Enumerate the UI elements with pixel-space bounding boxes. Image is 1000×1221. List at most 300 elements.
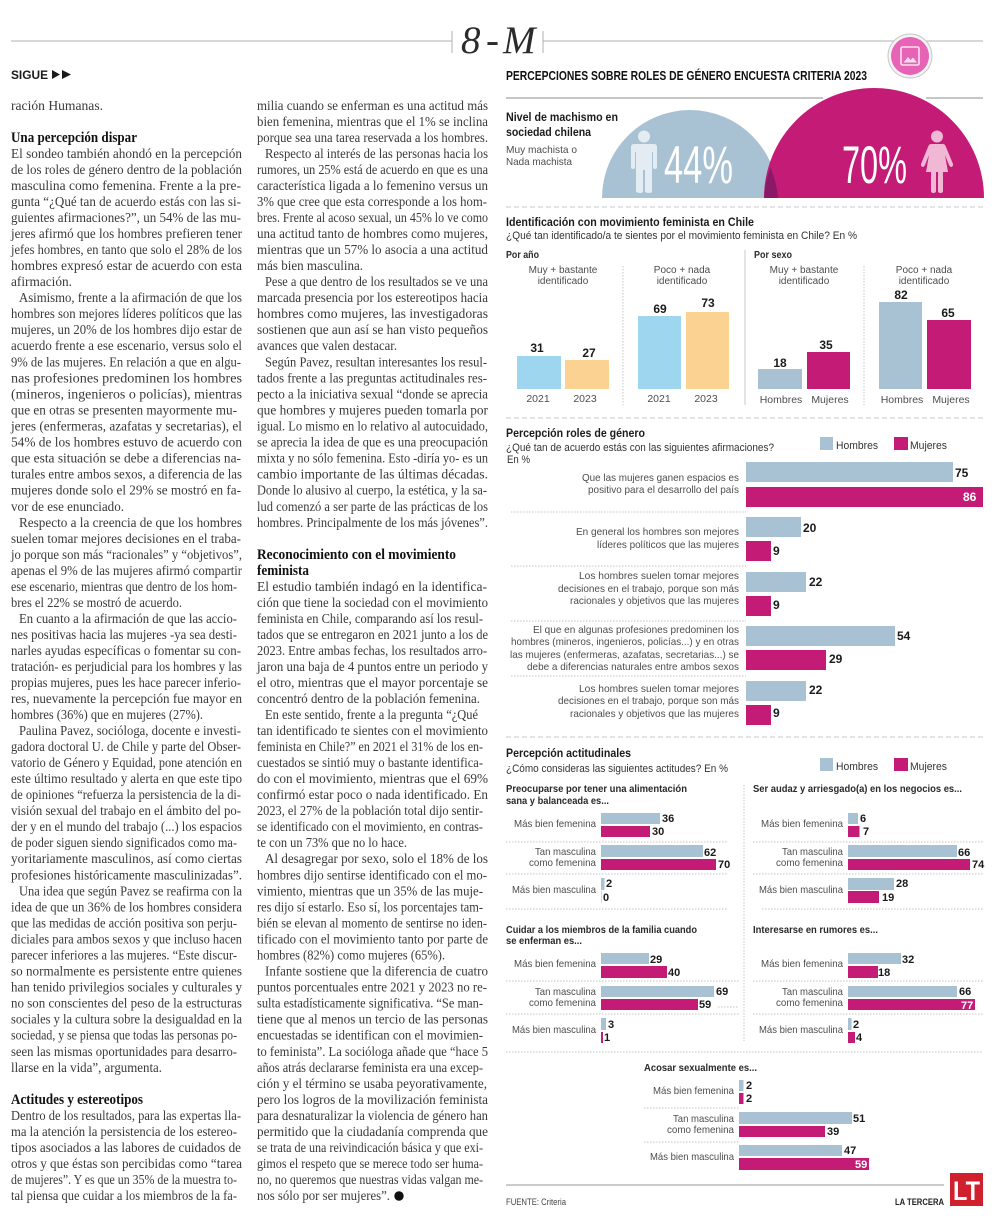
note: muy machista o nada machista: Muy machista o (506, 144, 577, 156)
legend: Hombres (836, 440, 878, 452)
paragraph: según Pavez: se aprecia la idea de que es una preocupación (257, 436, 488, 451)
paragraph: en este sentido (257, 708, 488, 851)
heading: Actitudes y estereotipos: Actitudes y estereotipos (11, 1092, 143, 1108)
paragraph: en este sentido: tan identificado te sientes con el movimiento (257, 724, 488, 739)
credit: La Tercera: LA TERCERA (895, 1197, 944, 1208)
row: mejores decisiones (repetida): 9 (773, 706, 780, 720)
panel: percepción actitudinales (506, 746, 985, 1171)
paragraph: al desagregar: hombres (82%) como mujeres (65%). (257, 949, 445, 964)
chart: por sexo muy + bastante identificado: Hombres (760, 394, 802, 406)
chart: por año poco + nada identificado: 2021 (647, 393, 671, 405)
row: mejores decisiones (repetida): Los hombres suelen tomar mejores (579, 683, 739, 695)
paragraph: una idea: no son conscientes del peso de la estructuras (11, 997, 242, 1012)
icon: image badge (888, 34, 932, 78)
paragraph: sondeo: jefes hombres, en tanto que solo el 28% de los (10, 243, 242, 258)
chart: acosar sexualmente: Acosar sexualmente es... (644, 1062, 757, 1074)
chart: cuidar a la familia: se enferman es... (506, 935, 582, 947)
icon: woman (921, 130, 953, 193)
chart: por año poco + nada identificado (638, 265, 729, 405)
row: mejores líderes políticos: 20 (803, 521, 817, 535)
paragraph: asimismo: (mineros, ingenieros o policías), mientras (11, 388, 242, 402)
paragraph: asimismo: acuerdo frente a ese escenario, versus solo el (11, 339, 242, 354)
chart: alimentación sana: 0 (603, 892, 609, 904)
paragraph: una idea: seen las mismas oportunidades para desarro- (11, 1045, 237, 1060)
paragraph: acciones positivas: hombres (36%) que en mujeres (27%). (11, 708, 203, 723)
paragraph: acciones positivas (11, 612, 242, 723)
page header: 8-M (11, 19, 983, 62)
paragraph: sondeo: afirmación. (11, 275, 72, 290)
SIGUE tag (11, 68, 71, 82)
paragraph: rumores (257, 147, 489, 274)
chart: por año muy + bastante identificado: identificado (538, 276, 589, 287)
heading: nivel de machismo: sociedad chilena (506, 125, 591, 139)
chart: alimentación sana: sana y balanceada es... (506, 795, 609, 807)
chart: por sexo poco + nada identificado (879, 265, 971, 406)
paragraph: el estudio: El estudio también indagó en la identifica- (257, 580, 487, 595)
chart: audaz en negocios: 28 (896, 878, 908, 890)
paragraph: el estudio: tados que se entregaron en 2021 junto a los de (257, 628, 488, 643)
paragraph: asimismo: hombres son mejores líderes políticos que las (11, 307, 242, 322)
paragraph: asimismo: mujeres, un 20% de los hombres dijo estar de (11, 323, 242, 338)
paragraph: según Pavez (257, 356, 489, 531)
chart: audaz en negocios (753, 783, 985, 904)
chart: acosar sexualmente: Más bien femenina (653, 1085, 734, 1097)
chart: acosar sexualmente: Más bien masculina (650, 1151, 734, 1163)
chart: por sexo poco + nada identificado: Mujeres (932, 394, 970, 406)
paragraph: dentro de los resultados: de mujeres”. Y es que un 35% de la muestra to- (11, 1173, 237, 1188)
chart: interesarse en rumores: Interesarse en rumores es... (753, 924, 878, 936)
paragraph: Paulina Pavez: de opiniones “refuerza la persistencia de la di- (11, 788, 241, 803)
chart: mujeres half circle (764, 88, 984, 198)
paragraph: asimismo: 9% de las mujeres. En relación a que en algu- (11, 356, 241, 370)
label: por año: Por año (506, 249, 539, 261)
paragraph: Infante: to feminista”. La socióloga añade que “hace 5 (257, 1045, 488, 1060)
paragraph: el estudio (256, 580, 488, 707)
paragraph: el estudio: el otro, mientras que el mayor porcentaje se (257, 676, 488, 691)
paragraph: dentro de los resultados: Dentro de los resultados, para las expertas lla- (11, 1109, 241, 1124)
paragraph: Paulina Pavez: profesiones históricamente masculinizadas”. (11, 868, 242, 883)
chart: alimentación sana: 70 (718, 859, 730, 871)
chart: por sexo poco + nada identificado: Poco + nada (896, 265, 953, 276)
chart: alimentación sana: 36 (662, 813, 674, 825)
chart: acosar sexualmente: 2 (746, 1080, 752, 1092)
chart: cuidar a la familia: Más bien femenina (514, 958, 596, 970)
paragraph: una idea: diciales para ambos sexos y que incluso hacen (11, 933, 242, 948)
heading: percepción actitudinales: Percepción actitudinales (506, 746, 631, 760)
row: diferencias naturales: 54 (897, 629, 911, 643)
row: mejores decisiones: decisiones en el trabajo, porque son más (558, 583, 739, 595)
chart: alimentación sana (506, 783, 730, 904)
chart: cuidar a la familia: 59 (699, 999, 711, 1011)
paragraph: una idea: que las medidas de acción positiva son perju- (11, 916, 237, 932)
paragraph: Infante (257, 965, 489, 1204)
paragraph: sondeo (10, 147, 243, 290)
paragraph: dentro de los resultados: tal piensa que cuidar a los miembros de la fa- (11, 1189, 237, 1204)
row: mejores decisiones (558, 570, 823, 616)
source note: FUENTE: Criteria (506, 1197, 567, 1208)
chart: por año muy + bastante identificado: 2023 (573, 393, 597, 405)
paragraph: creencia: suelen tomar mejores decisiones en el traba- (11, 532, 241, 547)
chart: acosar sexualmente (644, 1062, 869, 1171)
value: 70%: 70% (842, 136, 907, 195)
paragraph: acciones positivas: narles ayudas específicas o fomentar su con- (11, 644, 241, 659)
legend: Mujeres (910, 761, 947, 773)
paragraph: asimismo: que en otras se presenten mayormente mu- (11, 404, 237, 418)
paragraph: asimismo: nas profesiones predominen los hombres (11, 372, 242, 386)
article column 2 (256, 99, 489, 1204)
paragraph: el estudio: ción que tiene la sociedad con el movimiento (257, 596, 488, 611)
legend: Mujeres (910, 440, 947, 452)
paragraph: rumores: mientras que un 57% lo asocia a una actitud (257, 243, 488, 258)
chart: por sexo poco + nada identificado: Hombres (881, 394, 923, 406)
paragraph: una idea: sociedad, y se piensa que todas las personas po- (11, 1029, 237, 1044)
paragraph: una idea: so normalmente es persistente entre quienes (11, 965, 242, 980)
article column 1 (10, 99, 243, 1204)
paragraph: asimismo: mujeres donde solo el 29% se mostró en fa- (11, 484, 241, 499)
paragraph: estereotipos: avances que valen destacar. (257, 339, 397, 354)
chart: cuidar a la familia: Tan masculina (535, 986, 596, 998)
chart: cuidar a la familia: 69 (716, 986, 728, 998)
chart: audaz en negocios: Más bien masculina (759, 884, 843, 896)
chart: por sexo poco + nada identificado: 82 (894, 288, 908, 302)
paragraph: Infante: pero los logros de la movilización feminista (257, 1093, 489, 1108)
paragraph: Paulina Pavez (11, 724, 242, 883)
paragraph: Infante: permitido que la ciudadanía comprenda que (257, 1125, 488, 1140)
text block: continuation: ración Humanas. (11, 99, 103, 114)
paragraph: según Pavez: igual. Lo mismo en lo relativo al autocuidado, (257, 420, 488, 435)
row: mujeres ganen espacios (582, 462, 983, 507)
row: mejores decisiones: racionales y objetivos que las mujeres (570, 595, 739, 607)
chart: acosar sexualmente: Tan masculina (673, 1113, 734, 1125)
paragraph: continuation: milia cuando se enferman es una actitud más (257, 99, 488, 114)
chart: cuidar a la familia: 3 (608, 1019, 614, 1031)
paragraph: asimismo: vor de ese enunciado. (11, 500, 124, 515)
paragraph: según Pavez: lud comenzó a ser parte de las prácticas de los (257, 500, 488, 515)
paragraph: en este sentido: se identificado con el movimiento, en contras- (257, 820, 483, 835)
paragraph: creencia: ese escenario, mientras que dentro de los hom- (11, 580, 237, 595)
subheading: pregunta: ¿Qué tan de acuerdo estás con las siguientes afirmaciones? (506, 442, 774, 454)
paragraph: rumores: 3% que cree que esta corresponde a los hom- (257, 195, 487, 210)
row: diferencias naturales: hombres (mineros, ingenieros, policías...) y en otras (511, 636, 739, 648)
paragraph: al desagregar: bién se elevan al momento de sentirse no iden- (257, 916, 487, 932)
paragraph: Infante: ción y el término se usaba peyorativamente, (257, 1077, 487, 1092)
paragraph: Infante: nos sólo por ser mujeres”. (257, 1189, 390, 1204)
paragraph: según Pavez: Donde lo alusivo al cuerpo, la estética, y la sa- (257, 484, 487, 499)
row: diferencias naturales: debe a diferencias naturales entre ambos sexos (527, 661, 739, 673)
paragraph: continuation: bien femenina, mientras que el 1% se inclina (257, 115, 489, 130)
paragraph: en este sentido: do con el movimiento, mientras que el 69% (257, 772, 488, 787)
row: diferencias naturales (510, 624, 911, 673)
paragraph: Infante: gimos el respeto que se merece todo ser huma- (257, 1157, 483, 1172)
chart: cuidar a la familia: 40 (668, 967, 680, 979)
chart: alimentación sana: Más bien femenina (514, 818, 596, 830)
paragraph: al desagregar: hombres dijo sentirse identificado con el mo- (257, 868, 487, 883)
paragraph: sondeo: guientes afirmaciones?”, un 54% de las mu- (11, 211, 241, 226)
paragraph: continuation: porque sea una tarea reservada a los hombres. (257, 131, 488, 146)
heading: nivel de machismo: Nivel de machismo en (506, 110, 618, 124)
chart: alimentación sana: 30 (652, 826, 664, 838)
paragraph: el estudio: feminista en Chile, comparando así los resul- (257, 612, 483, 627)
chart: alimentación sana: Más bien masculina (512, 884, 596, 896)
chart: por año muy + bastante identificado (517, 265, 609, 405)
paragraph: acciones positivas: res, nuevamente la percepción fue mayor en (11, 692, 242, 707)
paragraph: acciones positivas: tratación- es perjudicial para los hombres y las (11, 660, 242, 675)
legend (820, 758, 947, 773)
chart: interesarse en rumores: 2 (853, 1019, 859, 1031)
chart: audaz en negocios: 66 (958, 847, 970, 859)
paragraph: estereotipos: marcada presencia por los estereotipos hacia (257, 291, 489, 306)
paragraph: sondeo: masculina como femenina. Frente a la pre- (11, 179, 241, 194)
paragraph: Infante: no, no queremos que nuestras vidas valgan me- (257, 1173, 483, 1188)
chart: audaz en negocios: Tan masculina (782, 846, 843, 858)
paragraph: al desagregar: res dijo sí estarlo. Eso sí, los porcentajes tam- (257, 900, 483, 916)
paragraph: estereotipos: hombres como mujeres, las investigadoras (257, 307, 488, 322)
chart: interesarse en rumores (753, 924, 983, 1044)
chart: por sexo muy + bastante identificado: 18 (773, 356, 787, 370)
row: mujeres ganen espacios: positivo para el desarrollo del país (588, 484, 739, 496)
paragraph: creencia (10, 516, 242, 611)
row: mejores líderes políticos (576, 517, 817, 561)
paragraph: Paulina Pavez: visión sexual del trabajo en el ámbito del po- (11, 804, 241, 819)
paragraph: Paulina Pavez: der y en el mundo del trabajo (...) los espacios (11, 820, 242, 835)
row: diferencias naturales: 29 (829, 652, 843, 666)
paragraph: acciones positivas: nes positivas hacia las mujeres -ya sea desti- (11, 628, 237, 643)
legend (820, 437, 947, 452)
row: mejores decisiones: 9 (773, 598, 780, 612)
chart: acosar sexualmente: 39 (827, 1126, 839, 1138)
chart: interesarse en rumores: Más bien masculina (759, 1024, 843, 1036)
chart: acosar sexualmente: 2 (746, 1093, 752, 1105)
paragraph: acciones positivas: En cuanto a la afirmación de que las accio- (19, 612, 237, 627)
paragraph: Paulina Pavez: yoritariamente masculinos, así como ciertas (11, 852, 242, 867)
paragraph: Paulina Pavez: vatorio de Género y Equidad, pone atención en (11, 756, 242, 771)
paragraph: creencia: apenas el 9% de las mujeres afirmó compartir (11, 564, 242, 579)
chart: alimentación sana: 2 (606, 878, 612, 890)
chart: interesarse en rumores: Más bien femenina (761, 958, 843, 970)
logo: LT: LT (953, 1176, 980, 1206)
icon: end of article dot (394, 1191, 404, 1201)
chart: por sexo muy + bastante identificado (758, 265, 850, 406)
paragraph: sondeo: jeres afirmó que los hombres prefieren tener (10, 227, 242, 242)
paragraph: estereotipos (257, 275, 489, 354)
heading: identificación: Identificación con movimiento feminista en Chile (506, 215, 754, 229)
chart: por sexo muy + bastante identificado: 35 (819, 338, 833, 352)
paragraph: según Pavez: hombres. Principalmente de los más jóvenes”. (257, 516, 488, 531)
chart: por año muy + bastante identificado: 31 (530, 341, 544, 355)
chart: acosar sexualmente: 47 (844, 1145, 856, 1157)
paragraph: Paulina Pavez: gadora doctoral U. de Chile y parte del Obser- (11, 740, 241, 755)
chart: por sexo muy + bastante identificado: identificado (779, 276, 830, 287)
chart: cuidar a la familia: 1 (604, 1032, 610, 1044)
row: mujeres ganen espacios: Que las mujeres ganen espacios es (582, 472, 739, 484)
chart: por año muy + bastante identificado: Muy + bastante (529, 265, 598, 276)
paragraph: Infante: tiene que al menos un tercio de las personas (257, 1013, 488, 1028)
paragraph: según Pavez: tados frente a las preguntas actitudinales res- (257, 372, 487, 386)
chart: cuidar a la familia: 29 (650, 954, 662, 966)
chart: por año poco + nada identificado: identificado (657, 276, 708, 287)
paragraph: una idea: Una idea que según Pavez se reafirma con la (19, 884, 243, 900)
page header: 8-M: 8 (461, 19, 481, 62)
row: mujeres ganen espacios: 86 (963, 490, 977, 504)
chart: audaz en negocios: 6 (860, 813, 866, 825)
paragraph: dentro de los resultados: tipos asociados a las labores de cuidados de (11, 1141, 241, 1156)
chart: interesarse en rumores: como femenina (776, 997, 843, 1009)
paragraph: el estudio: 2023. Entre ambas fechas, los resultados arro- (257, 644, 487, 659)
paragraph: una idea: idea de que un 36% de los hombres considera (11, 900, 243, 916)
paragraph: asimismo: turales entre ambos sexos, a diferencia de las (11, 468, 242, 483)
paragraph: en este sentido: te con un 73% que no lo hace. (257, 836, 407, 851)
paragraph: asimismo: que esta situación se debe a diferencias na- (11, 452, 241, 467)
label: por sexo: Por sexo (754, 249, 792, 261)
paragraph: Infante: para desnaturalizar la violencia de género han (257, 1109, 488, 1124)
paragraph: en este sentido: feminista en Chile?” en 2021 el 31% de los en- (257, 740, 483, 755)
footer (506, 1173, 983, 1208)
paragraph: en este sentido: En este sentido, frente a la pregunta “¿Qué (265, 708, 478, 723)
note: muy machista o nada machista (506, 144, 577, 168)
paragraph: creencia: bres el 22% se mostró de acuerdo. (11, 596, 182, 611)
chart: cuidar a la familia (506, 924, 739, 1044)
chart: interesarse en rumores: 4 (856, 1032, 863, 1044)
paragraph: asimismo (10, 291, 242, 515)
panel: nivel de machismo (506, 88, 984, 198)
paragraph: acciones positivas: propias mujeres, pues les hace parecer inferio- (11, 676, 241, 691)
paragraph: Infante: sulta estadísticamente significativa. “Se man- (257, 997, 483, 1012)
chart: por año poco + nada identificado: 73 (701, 296, 715, 310)
heading: percepción roles: Percepción roles de género (506, 426, 645, 440)
paragraph: una idea: llarse en la vida”, argumenta. (11, 1061, 162, 1076)
paragraph: rumores: rumores, un 25% está de acuerdo en que es una (257, 163, 489, 178)
chart: alimentación sana: Preocuparse por tener una alimentación (506, 783, 687, 795)
row: mejores decisiones (repetida): decisiones en el trabajo, porque son más (558, 695, 739, 707)
legend: Hombres (836, 761, 878, 773)
row: mujeres ganen espacios: 75 (955, 466, 969, 480)
row: mejores decisiones (repetida): 22 (809, 683, 823, 697)
chart: interesarse en rumores: 18 (878, 967, 890, 979)
paragraph: Paulina Pavez: de poder siguen siendo significados como ma- (11, 836, 237, 851)
heading: Reconocimiento con el movimiento feminista (257, 547, 456, 579)
value: 44%: 44% (664, 136, 733, 195)
subheading: pregunta: En % (507, 454, 530, 466)
paragraph: sondeo: El sondeo también ahondó en la percepción (11, 147, 242, 162)
chart: hombres half circle (602, 110, 778, 198)
chart: alimentación sana: 62 (704, 847, 716, 859)
chart: cuidar a la familia: como femenina (529, 997, 596, 1009)
chart: por año muy + bastante identificado: 2021 (526, 393, 550, 405)
chart: audaz en negocios: Más bien femenina (761, 818, 843, 830)
paragraph: Paulina Pavez: este último resultado y alerta en que este tipo (11, 772, 242, 787)
paragraph: rumores: bres. Frente al acoso sexual, un 45% lo ve como (257, 211, 488, 226)
chart: cuidar a la familia: Cuidar a los miembros de la familia cuando (506, 924, 697, 936)
paragraph: al desagregar: tificado con el movimiento tanto por parte de (257, 933, 488, 948)
chart: audaz en negocios: 74 (972, 859, 985, 871)
chart: por sexo muy + bastante identificado: Muy + bastante (770, 265, 839, 276)
paragraph: dentro de los resultados: otros y que éstas son percibidas como “tarea (11, 1157, 243, 1172)
chart: audaz en negocios: 7 (863, 826, 869, 838)
paragraph: una idea: parecer inferiores a las mujeres. “Este discur- (11, 949, 237, 964)
infographic title: PERCEPCIONES SOBRE ROLES DE GÉNERO ENCUESTA CRITERIA 2023 (506, 68, 867, 83)
paragraph: Infante: Infante sostiene que la diferencia de cuatro (265, 965, 488, 980)
row: diferencias naturales: las mujeres (enfermeras, azafatas, secretarias...) se (510, 649, 739, 661)
note: muy machista o nada machista: Nada machista (506, 156, 572, 168)
chart: acosar sexualmente: 59 (855, 1159, 867, 1171)
paragraph: el estudio: concentró dentro de la población femenina. (257, 692, 480, 707)
chart: interesarse en rumores: Tan masculina (782, 986, 843, 998)
row: mejores decisiones: Los hombres suelen tomar mejores (579, 570, 739, 582)
paragraph: según Pavez: Según Pavez, resultan interesantes los resul- (265, 356, 487, 370)
heading: Reconocimiento con el movimiento feminista: Reconocimiento con el movimiento (257, 547, 456, 563)
paragraph: según Pavez: pecto a la iniciativa sexual “donde se aprecia (257, 388, 489, 402)
subheading: pregunta: ¿Qué tan identificado/a te sientes por el movimiento feminista en Chile? En % (506, 230, 857, 242)
chart: interesarse en rumores: 66 (959, 986, 971, 998)
chart: audaz en negocios: como femenina (776, 857, 843, 869)
paragraph: según Pavez: que hombres y mujeres pueden tomarla por (257, 404, 488, 418)
paragraph: asimismo: jeres (enfermeras, azafatas y secretarias), el (10, 420, 242, 435)
page header: 8-M: - (486, 19, 499, 62)
paragraph: al desagregar (257, 852, 488, 964)
row: mejores decisiones (repetida) (558, 681, 823, 725)
row: mejores decisiones (repetida): racionales y objetivos que las mujeres (570, 708, 739, 720)
row: mejores líderes políticos: líderes políticos que las mujeres (597, 539, 739, 551)
heading: Una percepción dispar: Una percepción dispar (11, 130, 137, 146)
paragraph: sondeo: hombres expresó estar de acuerdo con esta (11, 259, 243, 274)
row: mejores decisiones: 22 (809, 575, 823, 589)
chart: por sexo poco + nada identificado: 65 (941, 306, 955, 320)
paragraph: al desagregar: Al desagregar por sexo, solo el 18% de los (265, 852, 488, 867)
chart: audaz en negocios: 19 (882, 892, 894, 904)
paragraph: sondeo: gunta “¿Qué tan de acuerdo estás con las si- (11, 195, 241, 210)
chart: interesarse en rumores: 32 (902, 954, 914, 966)
icon: man (631, 130, 657, 193)
chart: alimentación sana: como femenina (529, 857, 596, 869)
chart: por año muy + bastante identificado: 27 (582, 346, 596, 360)
paragraph: asimismo: 54% de los hombres estuvo de acuerdo con (11, 436, 242, 451)
paragraph: dentro de los resultados (11, 1109, 243, 1204)
chart: interesarse en rumores: 77 (961, 1000, 973, 1012)
chart: alimentación sana: Tan masculina (535, 846, 596, 858)
paragraph: asimismo: Asimismo, frente a la afirmación de que los (19, 291, 242, 306)
paragraph: creencia: Respecto a la creencia de que los hombres (19, 516, 242, 531)
heading: Reconocimiento con el movimiento feminista: feminista (257, 563, 310, 579)
paragraph: según Pavez: mixta y no sólo femenina. Esto -diría yo- es un (257, 452, 488, 467)
panel: identificación con movimiento feminista (506, 215, 971, 406)
chart: por sexo muy + bastante identificado: Mujeres (811, 394, 849, 406)
paragraph: Infante: encuestadas se identifican con el movimien- (257, 1029, 483, 1044)
paragraph: una idea: han tenido privilegios sociales y culturales y (11, 981, 242, 996)
chart: por año poco + nada identificado: Poco + nada (654, 265, 711, 276)
paragraph: rumores: Respecto al interés de las personas hacia los (265, 147, 488, 162)
paragraph: en este sentido: 2023, el 27% de la población total dijo sentir- (257, 804, 483, 819)
paragraph: una idea (11, 884, 243, 1076)
chart: acosar sexualmente: 51 (853, 1113, 865, 1125)
chart: por sexo poco + nada identificado: identificado (899, 276, 950, 287)
chart: audaz en negocios: Ser audaz y arriesgado(a) en los negocios es... (753, 783, 962, 795)
SIGUE tag: SIGUE (11, 68, 48, 82)
page header: 8-M: M (502, 19, 538, 62)
paragraph: dentro de los resultados: ma la atención la persistencia de los estereo- (11, 1125, 237, 1140)
chart: por año poco + nada identificado: 2023 (694, 393, 718, 405)
chart: acosar sexualmente: como femenina (667, 1124, 734, 1136)
chart: overlap of half circles (764, 167, 778, 198)
paragraph: estereotipos: sostienen que aun así se han visto pequeños (257, 323, 488, 338)
panel: percepción roles de género (506, 426, 983, 725)
paragraph: Paulina Pavez: Paulina Pavez, socióloga, docente e investi- (19, 724, 241, 739)
paragraph: al desagregar: vimiento, mientras que un 35% de las muje- (257, 884, 483, 900)
paragraph: sondeo: de los roles de género dentro de la población (11, 163, 242, 178)
chart: por año poco + nada identificado: 69 (653, 302, 667, 316)
paragraph: una idea: sociales y la cultura sobre la desigualdad en la (11, 1013, 243, 1028)
chart: cuidar a la familia: Más bien masculina (512, 1024, 596, 1036)
heading: nivel de machismo (506, 110, 618, 139)
